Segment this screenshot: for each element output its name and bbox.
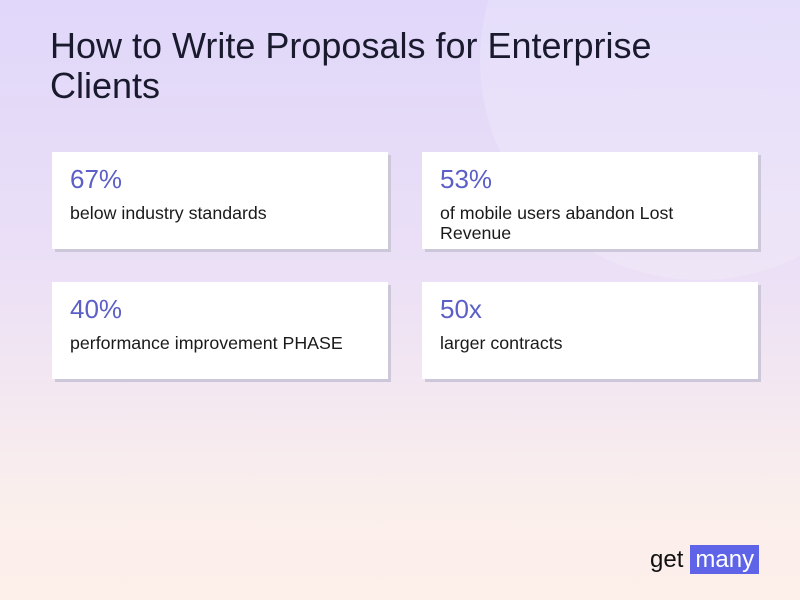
card: 40%: 40% [70, 294, 122, 324]
card: 67% [52, 152, 388, 249]
logo [650, 545, 759, 574]
card: 50x: 50x [440, 294, 482, 324]
card: 53% [422, 152, 758, 249]
logo: many [695, 546, 754, 573]
card: 67%: 67% [70, 164, 122, 194]
title: How to Write Proposals for Enterprise Clients [50, 25, 652, 106]
card: 40%: performance improvement PHASE [70, 333, 343, 353]
logo: get [650, 546, 683, 573]
card: 40% [52, 282, 388, 379]
card: 50x [422, 282, 758, 379]
card: 50x: larger contracts [440, 333, 563, 353]
card: 67%: below industry standards [70, 203, 267, 223]
card: 53%: of mobile users abandon Lost Revenue [440, 203, 673, 243]
card: 53%: 53% [440, 164, 492, 194]
